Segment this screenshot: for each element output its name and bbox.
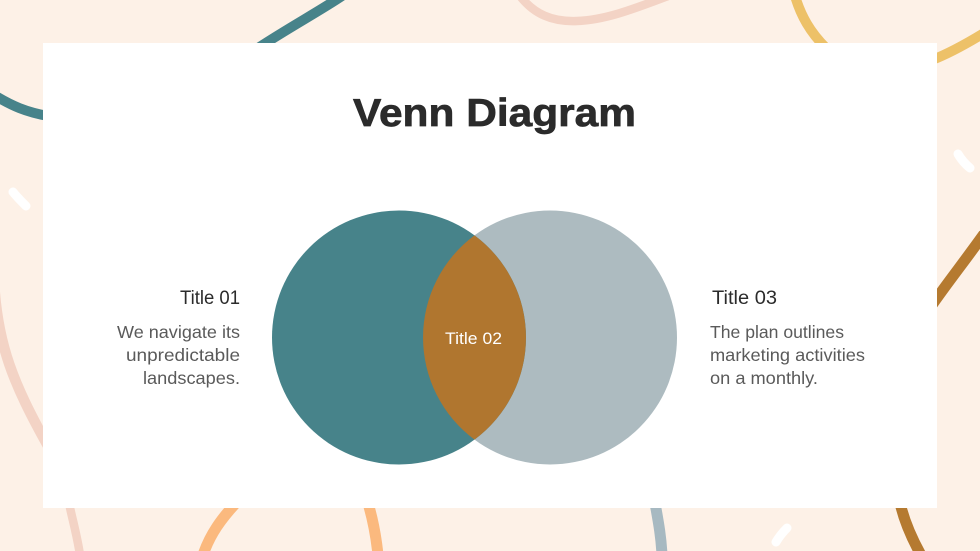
body: right description: The plan outlines [710,322,844,342]
body: right description: marketing activities [710,345,865,365]
text block: Title 03 [710,288,865,388]
body: right description: on a monthly. [710,368,818,388]
label: Title 02: Title 02 [445,330,502,348]
heading: Title 01: Title 01 [180,288,240,309]
heading: Title 03: Title 03 [712,288,777,309]
body: left description: landscapes. [143,368,240,388]
title: Venn Diagram [353,92,636,135]
intersection: brown lens [423,235,526,440]
decorative white dashes [13,154,970,542]
body: left description: unpredictable [126,345,240,365]
venn diagram [272,210,677,464]
body: left description: We navigate its [117,322,240,342]
circle: right grey [423,210,677,464]
body: left description [117,322,240,388]
circle: left teal [272,210,526,464]
text block: Title 01 [117,288,240,388]
body: right description [710,322,865,388]
panel: white card [43,43,937,508]
